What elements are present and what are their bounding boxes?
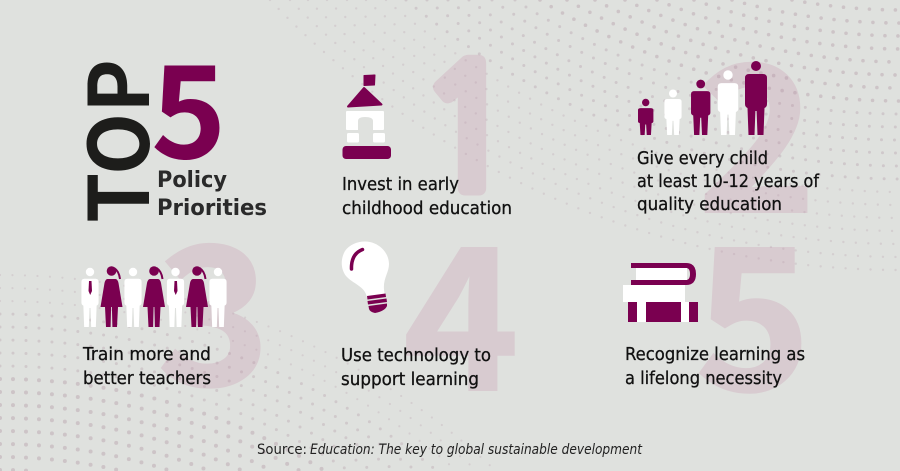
text: give every child: at least 10-12 years of — [637, 172, 820, 192]
text: invest in early childhood education — [342, 175, 512, 219]
panel 1: early childhood education — [342, 75, 512, 219]
text: recognize learning: Recognize learning as — [625, 345, 805, 365]
big numeral 4: 4 — [403, 161, 519, 447]
text: recognize learning — [625, 345, 805, 389]
text: give every child: quality education — [637, 195, 782, 215]
big numeral 1: 1 — [416, 45, 520, 216]
source line: Education: The key to global sustainable development — [310, 442, 643, 458]
text: use technology to support learning — [341, 346, 491, 390]
text: use technology to support learning: Use technology to — [341, 346, 491, 366]
big numeral 5: 5 — [695, 161, 811, 447]
text: recognize learning: a lifelong necessity — [625, 369, 782, 389]
title: Policy Priorities: Priorities — [157, 196, 267, 221]
text: train more and better teachers — [82, 345, 211, 389]
title block — [53, 10, 267, 223]
title: Policy Priorities: Policy — [157, 168, 227, 193]
title: 5: 5 — [151, 10, 227, 195]
text: give every child: Give every child — [637, 149, 768, 169]
panel 4: technology — [341, 242, 491, 390]
panel 5: lifelong learning — [623, 263, 805, 389]
icon: row of teachers — [81, 266, 227, 327]
panel 3: teachers — [81, 266, 227, 389]
text: invest in early childhood education: Invest in early — [342, 175, 459, 195]
panel 2: years of education — [637, 61, 820, 215]
title: TOP: TOP — [53, 59, 173, 223]
text: train more and better teachers: better teachers — [83, 369, 211, 389]
text: invest in early childhood education: childhood education — [342, 199, 512, 219]
icon: five growing figures — [638, 61, 767, 135]
big numeral 3: 3 — [157, 163, 270, 441]
text: train more and better teachers: Train more and — [82, 345, 211, 365]
text: give every child — [637, 149, 820, 215]
title: Policy Priorities — [157, 168, 267, 221]
text: use technology to support learning: support learning — [341, 370, 479, 390]
icon: building blocks — [342, 75, 391, 159]
source line: Source: — [257, 442, 307, 458]
icon: stack of books — [623, 263, 698, 322]
icon: light bulb — [342, 242, 389, 313]
